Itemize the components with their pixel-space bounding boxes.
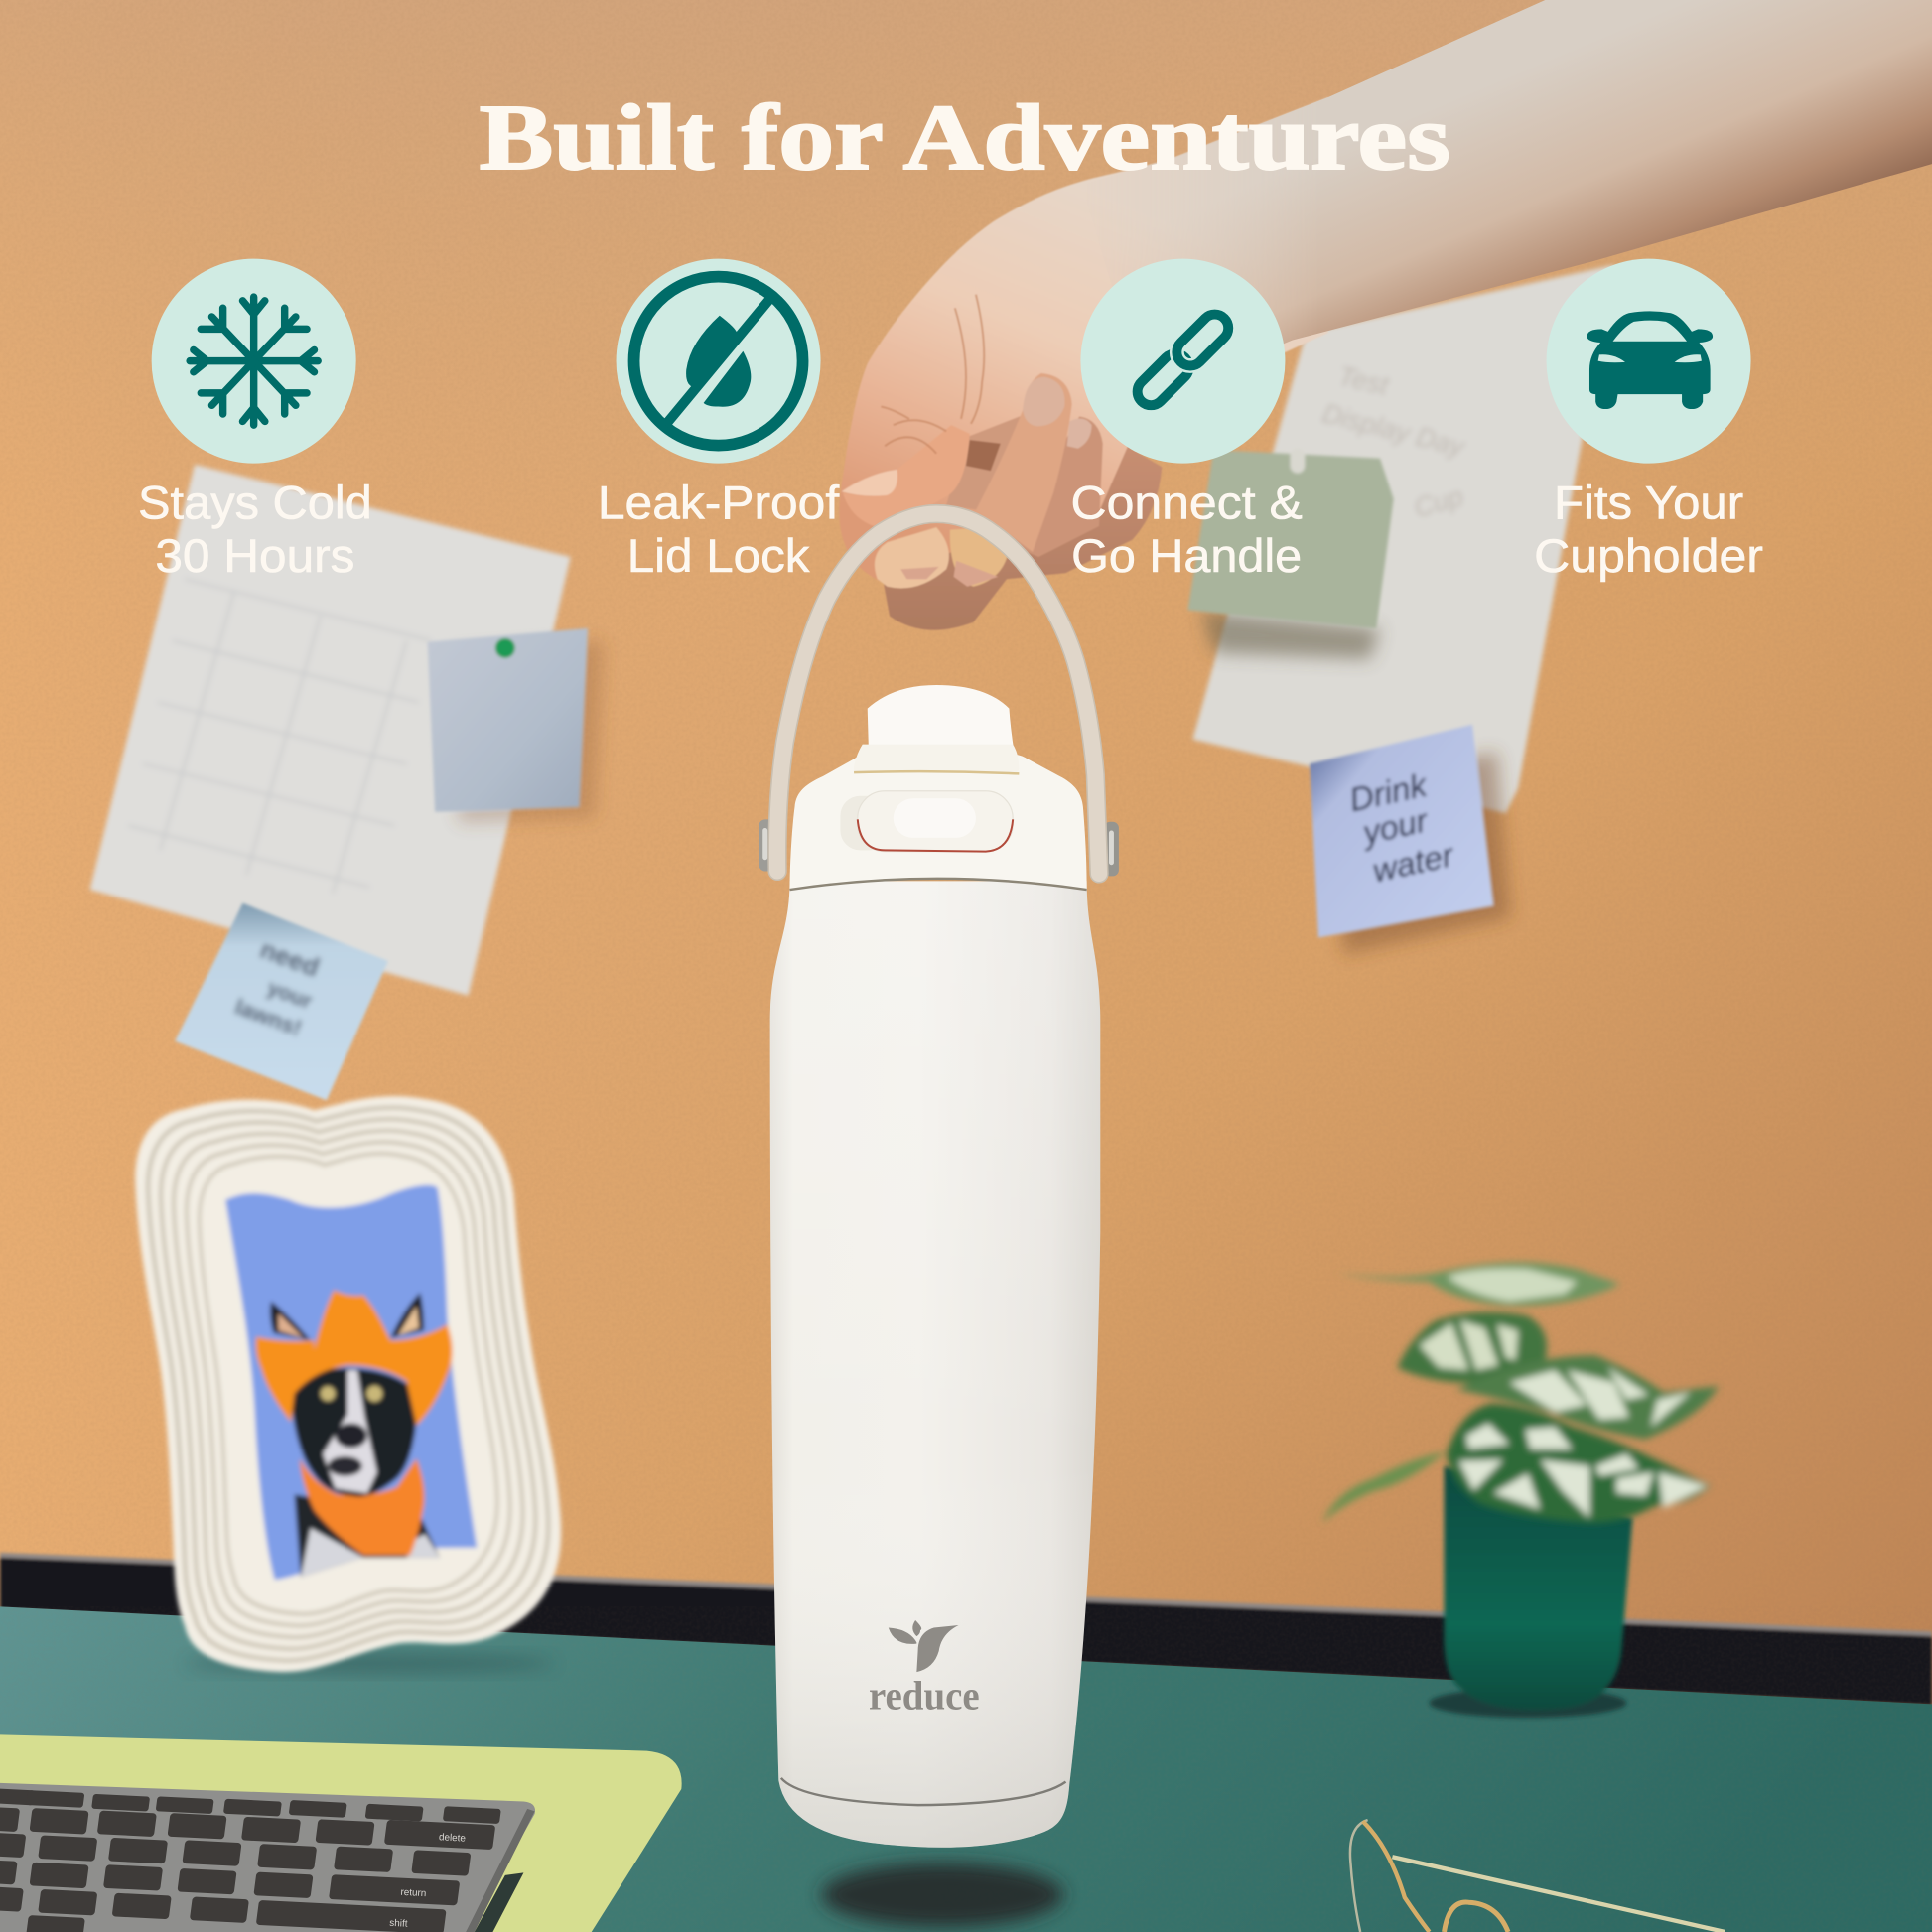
feature: fits your cupholder: [1534, 259, 1763, 582]
sticky note: light blue handwritten: lawns!: [231, 994, 305, 1040]
logo: [869, 1620, 980, 1718]
label: Connect &: [1070, 476, 1303, 528]
key legends: delete: [439, 1832, 467, 1845]
sticky note: light blue handwritten: your: [264, 976, 315, 1014]
handle bolts: [759, 819, 1119, 876]
back of hand: [839, 97, 1328, 583]
label: Go Handle: [1071, 529, 1302, 582]
sticky note: sage green: [1187, 449, 1394, 659]
dog ears: [270, 1302, 311, 1340]
dog face: [291, 1368, 416, 1497]
title: Built for Adventures: [480, 86, 1450, 190]
plant pot: [1430, 1466, 1632, 1718]
icon: car: [1587, 311, 1713, 409]
pinned paper: right notes: Test: [1335, 360, 1393, 401]
label: Lid Lock: [627, 529, 810, 582]
badge circle: [1080, 259, 1285, 464]
photo frame with dog portrait: [135, 1096, 561, 1673]
lid: [790, 755, 1087, 890]
pinned paper: right notes: Cup: [1411, 481, 1466, 523]
index finger: [976, 373, 1072, 552]
sticky note: Drink your water: your: [1358, 802, 1433, 852]
lock slider: [840, 796, 890, 850]
portrait background: [225, 1185, 477, 1580]
curled fingers: [875, 527, 949, 588]
label: Leak-Proof: [598, 476, 840, 528]
handle strap: [777, 514, 1099, 874]
frame shadow: [185, 1654, 554, 1673]
cowboy hat: [256, 1290, 453, 1426]
label: Fits Your: [1554, 476, 1743, 528]
sticky note: light blue handwritten: need: [256, 934, 324, 983]
thumb creases: [881, 295, 984, 454]
sticky note: Drink your water: water: [1369, 837, 1458, 891]
cap: [868, 685, 1014, 752]
keyboard: return: [400, 1887, 427, 1899]
badge circle: [617, 259, 821, 464]
sticky note: blue-grey with green pin: [428, 628, 604, 823]
bottle shadow on desk: [822, 1863, 1063, 1927]
icon: chain link: [1132, 309, 1234, 411]
sticky note: light blue handwritten: [175, 903, 388, 1100]
badge circle: [1547, 259, 1751, 464]
badge circle: [152, 259, 356, 464]
bottle: [759, 514, 1119, 1848]
hand: [839, 97, 1328, 630]
pinned paper: left schedule: [90, 465, 571, 996]
feature: connect and go handle: [1070, 259, 1303, 582]
keyboard: shift: [389, 1918, 408, 1930]
dog body: [295, 1494, 440, 1578]
sticky note: Drink your water: Drink: [1346, 766, 1432, 819]
bottle base seam: [781, 1778, 1066, 1805]
bottle body: [770, 881, 1100, 1848]
pinned paper: right notes: [1192, 265, 1614, 813]
label: Cupholder: [1534, 529, 1763, 582]
gap between thumb and index finger: [966, 440, 1001, 471]
thumb: [843, 425, 970, 526]
icon: crossed-out drop: [634, 277, 803, 446]
icon: snowflake: [190, 297, 318, 425]
plant leaves: [1322, 1262, 1719, 1523]
desk: [0, 1606, 1932, 1932]
lower fist in shadow: [884, 419, 1162, 630]
shadow behind index finger: [946, 413, 1029, 511]
thumb nail: [842, 470, 897, 496]
feature: leak-proof lid lock: [598, 259, 840, 582]
desk mat: [0, 1734, 682, 1932]
pinned paper: right notes: Display Day: [1319, 397, 1469, 463]
dog bandana: [300, 1458, 424, 1555]
sticky note: Drink your water: [1310, 725, 1511, 955]
middle finger: [1004, 416, 1103, 557]
arm: [1175, 0, 1932, 344]
keyboard: [0, 1783, 535, 1932]
label: Stays Cold: [138, 476, 372, 528]
label: 30 Hours: [155, 529, 354, 582]
logo: reduce: [869, 1673, 980, 1718]
baseboard: [0, 1553, 1932, 1706]
glasses: [1350, 1820, 1725, 1932]
feature: stays cold: [138, 259, 372, 582]
